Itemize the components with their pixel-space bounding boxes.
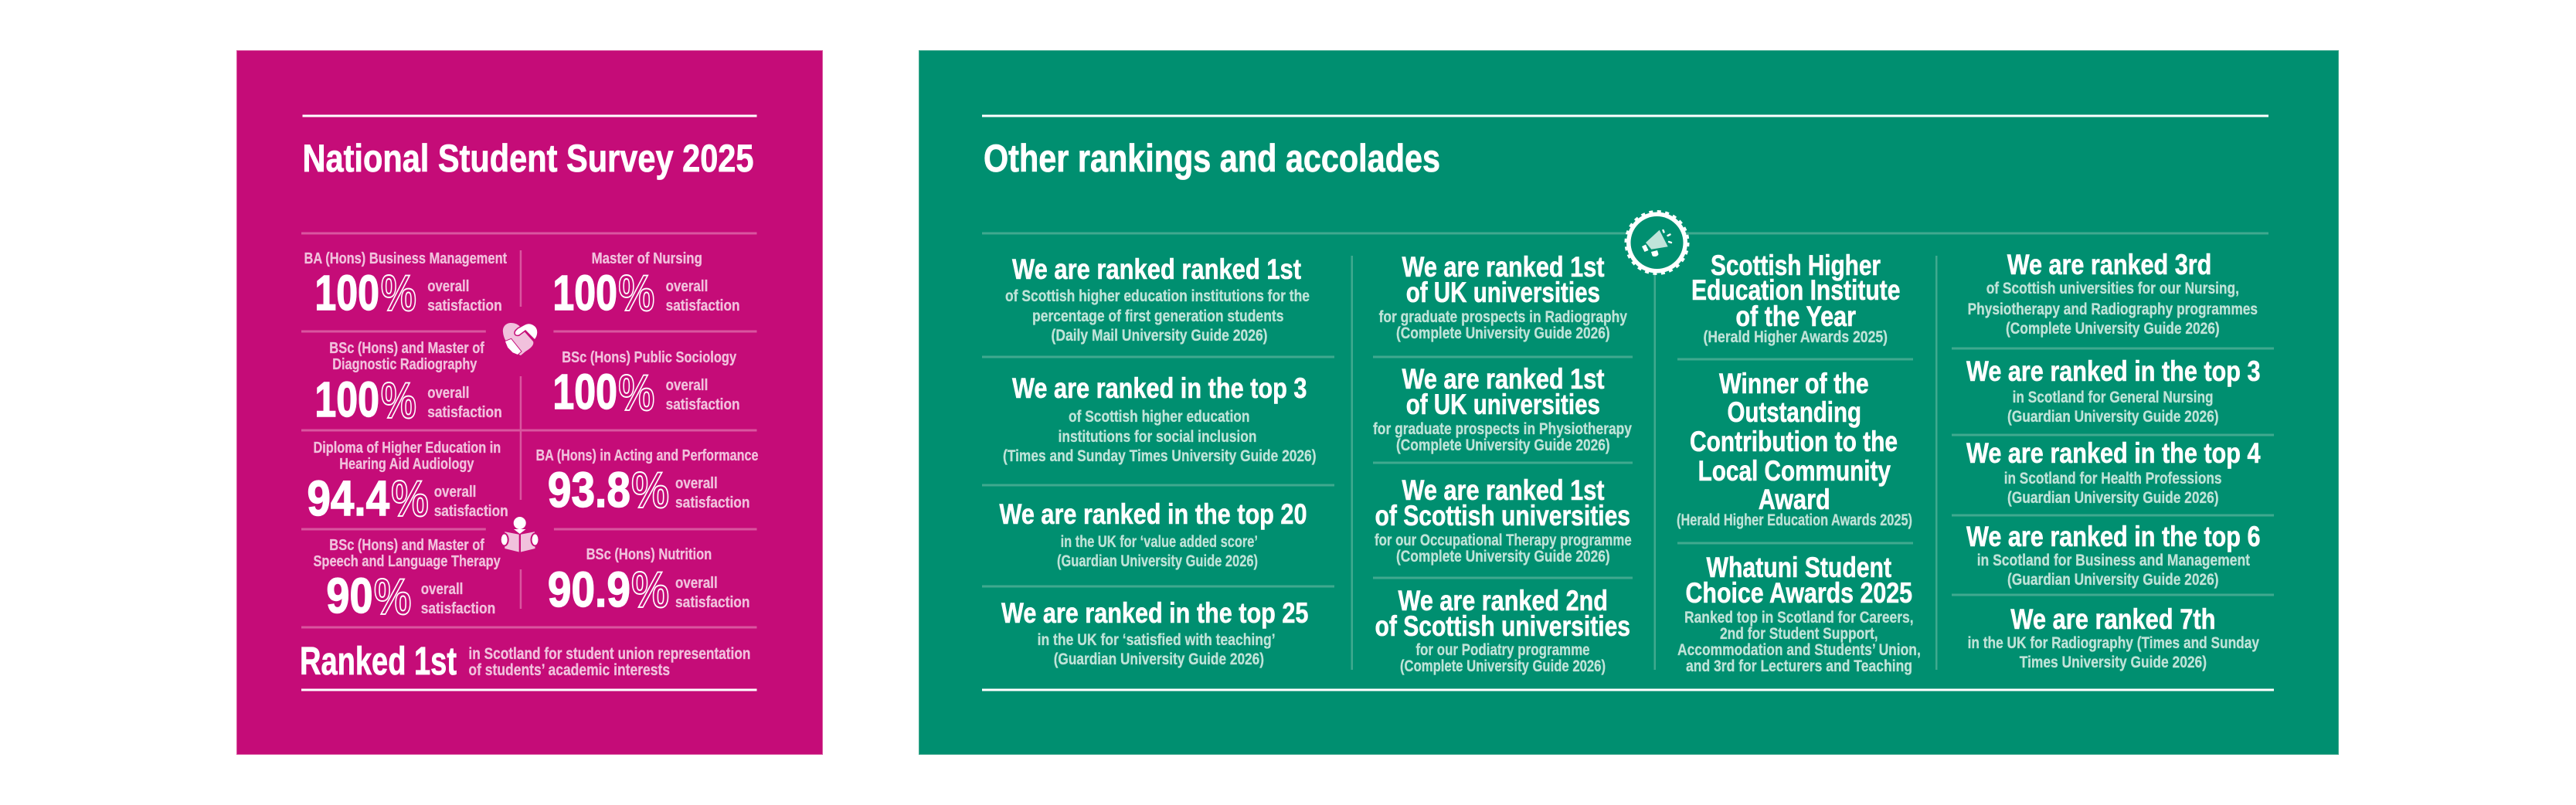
callout: Ranked 1st: Ranked 1st [300, 639, 457, 683]
text block: 1st Scottish Occupational Therapy: of Scottish universities [1375, 500, 1630, 532]
stat: Master of Nursing: Master of Nursing [592, 250, 702, 267]
text block: top 6 Business and Management: (Guardian University Guide 2026) [2007, 571, 2219, 589]
text block: ranked 1st first generation students: of Scottish higher education institutions for the [1005, 287, 1310, 305]
text block: Whatuni Student Choice Awards: Ranked top in Scotland for Careers, [1684, 609, 1914, 627]
stat: BSc (Hons) and Master of Diagnostic Radiography: Diagnostic Radiography [332, 356, 477, 373]
stat: BSc (Hons) and Master of Diagnostic Radiography: 100 [314, 372, 379, 427]
stat: BA (Hons) in Acting and Performance: % [631, 461, 669, 518]
stat: BSc (Hons) and Master of Speech and Language Therapy: satisfaction [421, 600, 495, 617]
panel: National Student Survey [236, 51, 822, 754]
text block: top 3 General Nursing [1966, 355, 2261, 426]
text block: top 4 Health Professions [1966, 437, 2261, 507]
stat: Diploma of Higher Education in Hearing Aid Audiology: overall [434, 484, 476, 501]
text block: 7th Radiography: We are ranked 7th [2010, 603, 2216, 635]
stat: BSc (Hons) and Master of Diagnostic Radiography: BSc (Hons) and Master of [329, 340, 484, 357]
stat: Master of Nursing [552, 250, 740, 321]
text block: top 20 value added: We are ranked in the top 20 [1000, 498, 1307, 530]
text block: Winner Outstanding Contribution: (Herald Higher Education Awards 2025) [1677, 511, 1912, 529]
text block: 1st UK Physiotherapy: of UK universities [1406, 389, 1600, 420]
stat: BA (Hons) in Acting and Performance: satisfaction [675, 494, 749, 511]
text block: top 4 Health Professions: (Guardian University Guide 2026) [2007, 489, 2219, 507]
stat: BA (Hons) Business Management: BA (Hons) Business Management [304, 250, 507, 267]
text block: Scottish Higher Education Institute of the Year: (Herald Higher Awards 2025) [1703, 328, 1888, 346]
text block: ranked 1st first generation students: percentage of first generation students [1032, 307, 1284, 325]
stat: BSc (Hons) and Master of Speech and Language Therapy [314, 537, 501, 625]
text block: 7th Radiography [1968, 603, 2259, 671]
text block: top 4 Health Professions: in Scotland for Health Professions [2004, 470, 2222, 487]
text block: Whatuni Student Choice Awards: Whatuni Student [1706, 552, 1891, 583]
stat: BSc (Hons) and Master of Diagnostic Radiography: % [381, 372, 416, 429]
text block: Whatuni Student Choice Awards: and 3rd for Lecturers and Teaching [1686, 657, 1912, 675]
text block: 1st UK Physiotherapy [1373, 363, 1632, 454]
text block: 2nd Scottish Podiatry: (Complete University Guide 2026) [1400, 657, 1606, 675]
text block: top 3 General Nursing: in Scotland for General Nursing [2013, 389, 2214, 406]
stat: BA (Hons) Business Management [304, 250, 507, 321]
stat: BA (Hons) in Acting and Performance [536, 447, 759, 518]
stat: Master of Nursing: overall [666, 278, 708, 295]
text block: 3rd Nursing Physiotherapy Radiography: Physiotherapy and Radiography programmes [1968, 301, 2258, 318]
text block: top 3 social inclusion: institutions for social inclusion [1059, 428, 1256, 446]
text block: Whatuni Student Choice Awards [1677, 552, 1921, 675]
text block: 1st UK Physiotherapy: (Complete University Guide 2026) [1396, 436, 1610, 454]
text block: top 6 Business and Management: in Scotland for Business and Management [1977, 552, 2250, 569]
text block: ranked 1st first generation students: (Daily Mail University Guide 2026) [1051, 327, 1267, 345]
text block: 1st Scottish Occupational Therapy: for our Occupational Therapy programme [1375, 532, 1632, 549]
text block: Scottish Higher Education Institute of the Year: of the Year [1735, 301, 1856, 332]
text block: Winner Outstanding Contribution: Winner of the [1719, 368, 1869, 399]
text block: top 25 satisfied with teaching: in the UK for ‘satisfied with teaching’ [1038, 631, 1276, 649]
text block: Whatuni Student Choice Awards: Accommodation and Students’ Union, [1677, 641, 1921, 659]
text block: top 25 satisfied with teaching: (Guardian University Guide 2026) [1054, 650, 1264, 668]
text block: top 4 Health Professions: We are ranked in the top 4 [1966, 437, 2261, 469]
stat: BSc (Hons) and Master of Speech and Language Therapy: Speech and Language Therapy [314, 553, 501, 570]
text block: 1st UK Radiography [1379, 251, 1627, 342]
text block: top 3 social inclusion: We are ranked in the top 3 [1012, 372, 1307, 404]
text block: 1st Scottish Occupational Therapy [1375, 474, 1632, 566]
text block: 1st UK Physiotherapy: We are ranked 1st [1402, 363, 1604, 395]
text block: ranked 1st first generation students: We are ranked ranked 1st [1012, 253, 1301, 285]
icon: person reading book [501, 517, 539, 552]
stat: BSc (Hons) and Master of Speech and Language Therapy: 90 [326, 568, 373, 623]
text block: top 3 General Nursing: (Guardian University Guide 2026) [2007, 408, 2219, 426]
text block: Winner Outstanding Contribution [1677, 368, 1912, 529]
text block: 3rd Nursing Physiotherapy Radiography: of Scottish universities for our Nursing, [1986, 280, 2239, 297]
stat: BSc (Hons) Public Sociology [552, 349, 740, 421]
stat: Master of Nursing: 100 [552, 265, 617, 321]
text block: ranked 1st first generation students [1005, 253, 1310, 345]
stat: BSc (Hons) and Master of Speech and Language Therapy: % [374, 568, 411, 625]
callout: Ranked 1st: of students’ academic interests [468, 661, 670, 679]
stat: BSc (Hons) and Master of Speech and Language Therapy: overall [421, 581, 463, 598]
text block: 2nd Scottish Podiatry: We are ranked 2nd [1398, 585, 1608, 616]
text block: 2nd Scottish Podiatry: of Scottish universities [1375, 610, 1630, 642]
text block: 1st UK Radiography: (Complete University Guide 2026) [1396, 324, 1610, 342]
stat: Diploma of Higher Education in Hearing Aid Audiology: satisfaction [434, 503, 508, 520]
stat: BSc (Hons) Nutrition: 90.9 [548, 562, 630, 617]
text block: Whatuni Student Choice Awards: 2nd for Student Support, [1720, 625, 1878, 643]
stat: Master of Nursing: satisfaction [666, 297, 740, 314]
text block: Scottish Higher Education Institute of the Year: Education Institute [1691, 274, 1900, 306]
text block: Scottish Higher Education Institute of the Year: Scottish Higher [1711, 250, 1881, 281]
text block: top 3 social inclusion [1003, 372, 1317, 465]
text block: top 20 value added [1000, 498, 1307, 570]
text block: Whatuni Student Choice Awards: Choice Awards 2025 [1686, 577, 1912, 609]
text block: top 3 General Nursing: We are ranked in the top 3 [1966, 355, 2261, 387]
text block: 1st UK Radiography: We are ranked 1st [1402, 251, 1604, 283]
stat: BSc (Hons) Public Sociology: BSc (Hons) Public Sociology [562, 349, 737, 366]
text block: top 6 Business and Management: We are ranked in the top 6 [1966, 521, 2261, 552]
stat: Master of Nursing: % [618, 264, 654, 321]
stat: BSc (Hons) Nutrition [548, 546, 749, 618]
stat: BA (Hons) Business Management: overall [427, 278, 469, 295]
stat: Diploma of Higher Education in Hearing Aid Audiology: % [391, 470, 429, 527]
text block: 3rd Nursing Physiotherapy Radiography: We are ranked 3rd [2007, 249, 2211, 280]
text block: 3rd Nursing Physiotherapy Radiography: (Complete University Guide 2026) [2006, 320, 2220, 338]
heading: National Student Survey 2025: National Student Survey 2025 [303, 137, 754, 180]
stat: BSc (Hons) and Master of Speech and Language Therapy: BSc (Hons) and Master of [329, 537, 484, 554]
text block: 1st Scottish Occupational Therapy: We are ranked 1st [1402, 474, 1604, 506]
stat: BSc (Hons) Public Sociology: satisfaction [666, 396, 740, 413]
stat: Diploma of Higher Education in Hearing Aid Audiology [308, 440, 508, 527]
stat: BSc (Hons) Nutrition: BSc (Hons) Nutrition [586, 546, 712, 563]
text block: 7th Radiography: Times University Guide 2026) [2020, 654, 2207, 671]
text block: top 6 Business and Management [1966, 521, 2261, 589]
icon: megaphone badge [1626, 212, 1687, 273]
stat: Diploma of Higher Education in Hearing Aid Audiology: 94.4 [308, 470, 389, 526]
text block: 2nd Scottish Podiatry [1375, 585, 1630, 675]
stat: Diploma of Higher Education in Hearing Aid Audiology: Diploma of Higher Education in [314, 440, 501, 457]
stat: Diploma of Higher Education in Hearing Aid Audiology: Hearing Aid Audiology [339, 456, 474, 473]
text block: top 25 satisfied with teaching [1001, 597, 1308, 668]
text block: Winner Outstanding Contribution: Award [1759, 484, 1830, 515]
stat: BA (Hons) in Acting and Performance: BA (Hons) in Acting and Performance [536, 447, 759, 464]
stat: BSc (Hons) and Master of Diagnostic Radiography [314, 340, 502, 429]
stat: BA (Hons) Business Management: % [381, 264, 416, 321]
callout: Ranked 1st [300, 639, 751, 683]
callout: Ranked 1st: in Scotland for student union representation [468, 645, 751, 663]
text block: 2nd Scottish Podiatry: for our Podiatry programme [1415, 641, 1590, 659]
text block: top 20 value added: (Guardian University Guide 2026) [1057, 552, 1258, 570]
stat: BSc (Hons) and Master of Diagnostic Radiography: satisfaction [427, 404, 502, 421]
panel: Other rankings and accolades [919, 51, 2338, 754]
text block: 1st Scottish Occupational Therapy: (Complete University Guide 2026) [1396, 548, 1610, 566]
text block: 1st UK Radiography: for graduate prospects in Radiography [1379, 308, 1627, 326]
text block: top 25 satisfied with teaching: We are ranked in the top 25 [1001, 597, 1308, 629]
icon: handshake heart [503, 323, 538, 355]
stat: BSc (Hons) Nutrition: % [631, 561, 669, 618]
text block: 1st UK Radiography: of UK universities [1406, 277, 1600, 308]
stat: BSc (Hons) Public Sociology: overall [666, 377, 708, 394]
heading: Other rankings and accolades: Other rankings and accolades [984, 137, 1440, 180]
stat: BSc (Hons) Nutrition: satisfaction [675, 594, 749, 611]
text block: Winner Outstanding Contribution: Local Community [1698, 455, 1891, 487]
stat: BA (Hons) Business Management: satisfaction [427, 297, 502, 314]
text block: 3rd Nursing Physiotherapy Radiography [1968, 249, 2258, 338]
text block: top 3 social inclusion: (Times and Sunday Times University Guide 2026) [1003, 447, 1317, 465]
stat: BA (Hons) Business Management: 100 [314, 265, 379, 321]
stat: BSc (Hons) Nutrition: overall [675, 575, 718, 592]
stat: BSc (Hons) Public Sociology: % [618, 364, 654, 421]
stat: BSc (Hons) and Master of Diagnostic Radiography: overall [427, 385, 469, 402]
text block: Scottish Higher Education Institute of the Year [1691, 250, 1900, 346]
text block: top 3 social inclusion: of Scottish higher education [1069, 408, 1250, 426]
text block: top 20 value added: in the UK for ‘value added score’ [1061, 533, 1258, 551]
stat: BA (Hons) in Acting and Performance: overall [675, 475, 718, 492]
stat: BA (Hons) in Acting and Performance: 93.8 [548, 462, 630, 518]
stat: BSc (Hons) Public Sociology: 100 [552, 364, 617, 419]
text block: Winner Outstanding Contribution: Outstanding [1728, 396, 1861, 428]
text block: 1st UK Physiotherapy: for graduate prospects in Physiotherapy [1373, 420, 1632, 438]
text block: Winner Outstanding Contribution: Contribution to the [1690, 426, 1898, 457]
text block: 7th Radiography: in the UK for Radiography (Times and Sunday [1968, 634, 2259, 652]
